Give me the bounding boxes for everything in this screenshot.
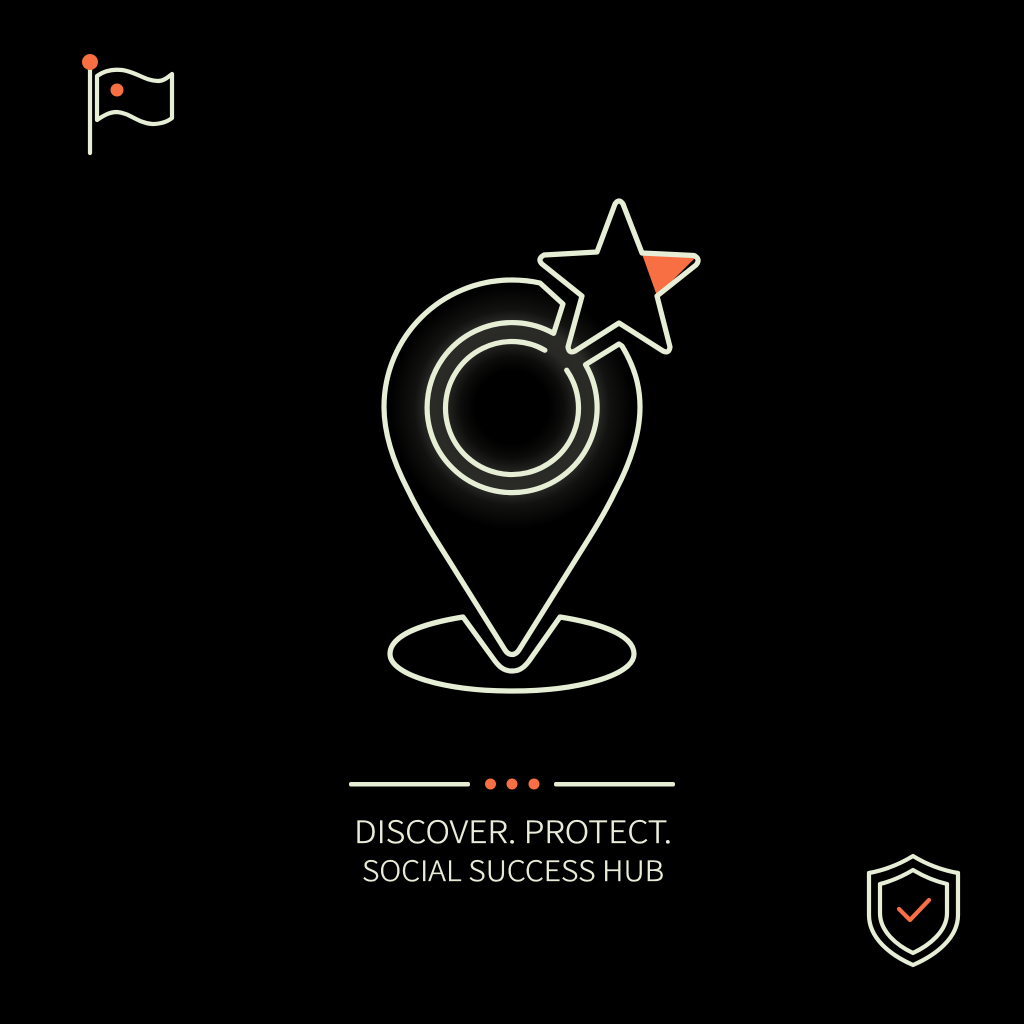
icon: flag [82, 54, 172, 153]
pin outline with outer ring [384, 280, 640, 654]
icon: location pin with star [384, 201, 698, 691]
base ellipse [390, 617, 634, 691]
star outline [540, 201, 698, 352]
star accent [642, 254, 696, 296]
subtitle: SOCIAL SUCCESS HUB [362, 850, 664, 890]
tagline: DISCOVER. PROTECT. [354, 807, 672, 852]
ring glow [390, 286, 634, 530]
icon: shield with check [869, 856, 958, 965]
divider [349, 778, 675, 790]
inner ring [446, 342, 579, 475]
